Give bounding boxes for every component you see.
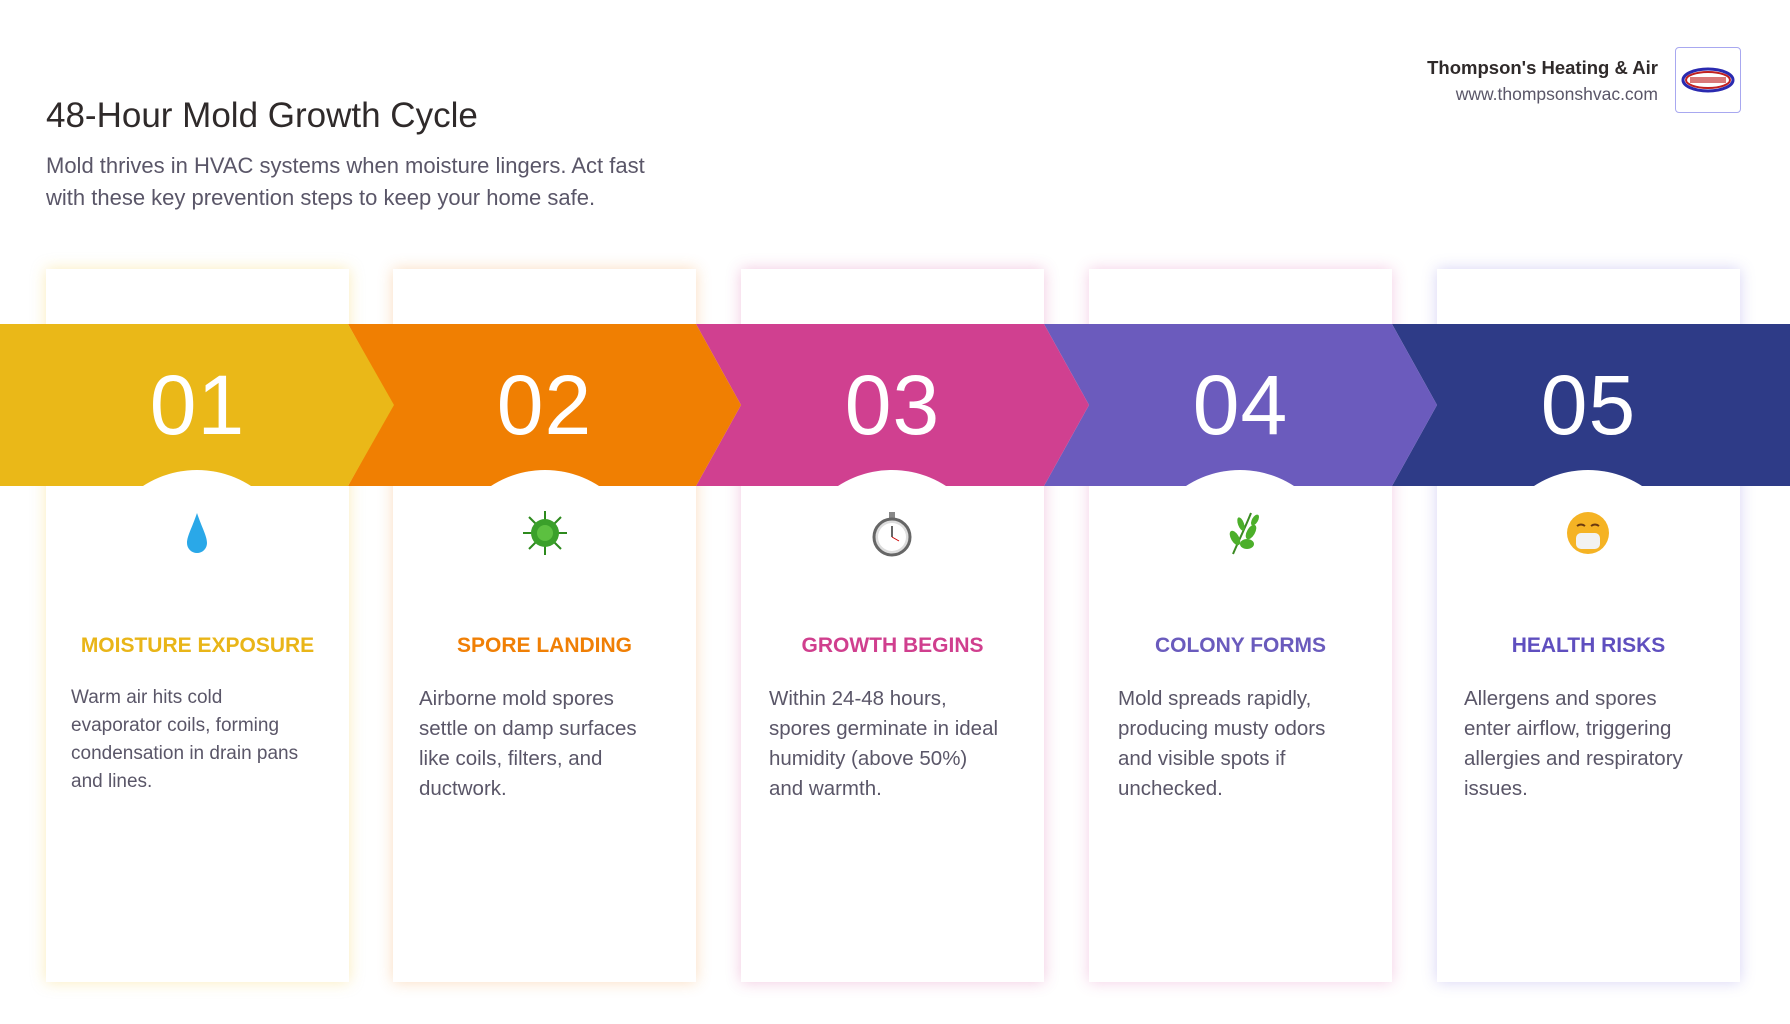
- text 5: allergies and respiratory: [1464, 747, 1683, 770]
- card 4: [1089, 269, 1392, 982]
- card 5: [1437, 269, 1740, 982]
- text: 02: [497, 358, 592, 452]
- logo: [1675, 47, 1741, 113]
- text 1: [71, 687, 298, 792]
- card 3: [741, 269, 1044, 982]
- text 4: [1118, 687, 1325, 800]
- bumps: [98, 470, 296, 668]
- icon: spore: [523, 511, 567, 555]
- heading 2: SPORE LANDING: [457, 634, 632, 657]
- icon: herb: [1230, 512, 1259, 554]
- card 1: [46, 269, 349, 982]
- text 2: like coils, filters, and: [419, 747, 602, 770]
- chevron band: [0, 324, 1790, 486]
- text 5: Allergens and spores: [1464, 687, 1657, 710]
- text 1: evaporator coils, forming: [71, 715, 279, 736]
- brand text: Thompson's Heating & Air: [1427, 57, 1658, 78]
- heading 4: COLONY FORMS: [1155, 634, 1326, 657]
- text 2: Airborne mold spores: [419, 687, 614, 710]
- brand text: www.thompsonshvac.com: [1456, 84, 1658, 104]
- text 3: humidity (above 50%): [769, 747, 967, 770]
- text 4: and visible spots if: [1118, 747, 1286, 770]
- text 4: producing musty odors: [1118, 717, 1325, 740]
- text 4: Mold spreads rapidly,: [1118, 687, 1311, 710]
- text 3: spores germinate in ideal: [769, 717, 998, 740]
- heading 1: MOISTURE EXPOSURE: [81, 634, 314, 657]
- text: 03: [845, 358, 940, 452]
- subtitle: [46, 153, 645, 210]
- text 5: issues.: [1464, 777, 1528, 800]
- card 2: [393, 269, 696, 982]
- subtitle: Mold thrives in HVAC systems when moisture lingers. Act fast: [46, 153, 645, 178]
- text 1: Warm air hits cold: [71, 687, 222, 708]
- text 3: Within 24-48 hours,: [769, 687, 947, 710]
- text 3: and warmth.: [769, 777, 882, 800]
- text 1: condensation in drain pans: [71, 743, 298, 764]
- text: 05: [1541, 358, 1636, 452]
- title: 48-Hour Mold Growth Cycle: [46, 96, 478, 135]
- text 3: [769, 687, 998, 800]
- icon: mask face: [1567, 512, 1609, 554]
- icon: water drop: [187, 513, 207, 553]
- subtitle: with these key prevention steps to keep your home safe.: [46, 185, 595, 210]
- icon: stopwatch: [872, 512, 912, 556]
- heading 3: GROWTH BEGINS: [802, 634, 984, 657]
- text 5: [1464, 687, 1683, 800]
- text: 04: [1193, 358, 1288, 452]
- numbers: 01: [150, 358, 245, 452]
- text 4: unchecked.: [1118, 777, 1223, 800]
- brand text: [1427, 57, 1658, 104]
- text 2: ductwork.: [419, 777, 507, 800]
- heading 5: HEALTH RISKS: [1512, 634, 1665, 657]
- text 2: [419, 687, 637, 800]
- text 2: settle on damp surfaces: [419, 717, 637, 740]
- text 1: and lines.: [71, 771, 152, 792]
- text 5: enter airflow, triggering: [1464, 717, 1671, 740]
